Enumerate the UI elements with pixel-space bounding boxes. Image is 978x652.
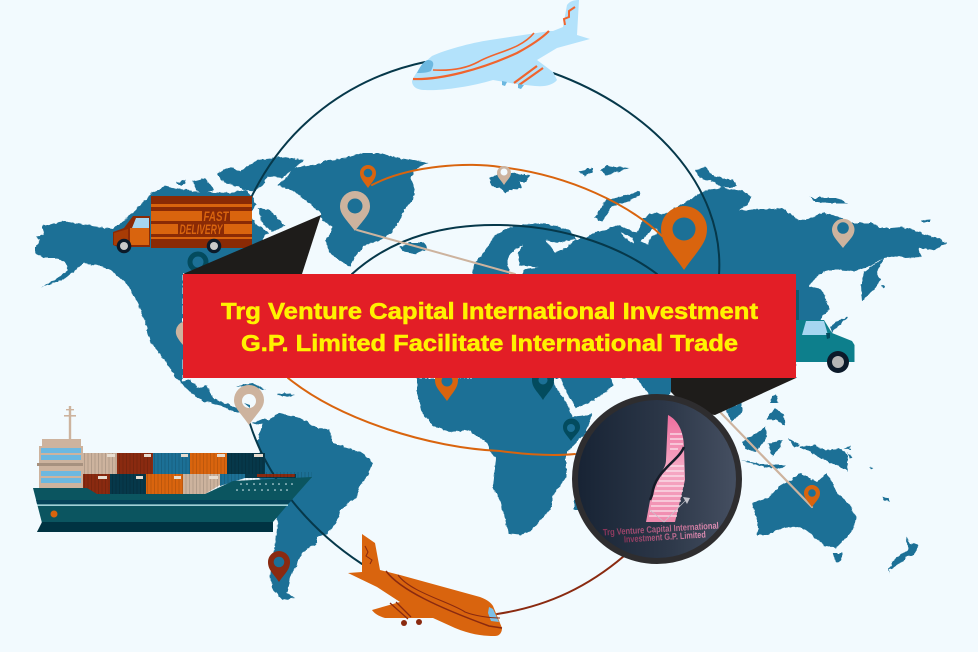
mast (64, 406, 76, 440)
Africa (417, 378, 592, 535)
Labrador (258, 208, 285, 232)
Australia (752, 473, 856, 548)
containers (83, 453, 312, 494)
callout pointer: upper (183, 215, 321, 274)
brown route (497, 556, 624, 614)
pin: Central America tan (234, 385, 264, 425)
route lines (250, 62, 812, 614)
Arabia (560, 378, 614, 408)
pin: USA tan (176, 322, 183, 345)
inland seas: Baltic, White Sea, Ob (507, 228, 658, 276)
Caribbean islands (236, 383, 295, 425)
banner title line 1: Trg Venture Capital International Investment (221, 298, 758, 324)
Alaska and Arctic islands (150, 157, 305, 199)
Southeast Asia (726, 395, 873, 471)
Iceland (400, 243, 427, 254)
Sakhalin, Kamchatka (861, 258, 884, 302)
outer circle route top left (250, 62, 425, 200)
pin: Siberia tan (832, 219, 854, 248)
Japan (830, 317, 848, 332)
company logo text: Investment G.P. Limited (624, 530, 706, 544)
pin: Svalbard tan (497, 166, 511, 185)
tower logo (646, 415, 690, 522)
pin: South America dark red (268, 551, 290, 582)
Madagascar (574, 497, 580, 510)
portholes (236, 483, 293, 491)
truck: teal (796, 290, 854, 373)
superstructure (37, 439, 84, 489)
company logo text: Trg Venture Capital International (603, 520, 719, 538)
tan route Australia (720, 412, 812, 507)
pin: West Africa orange (435, 376, 458, 401)
Eurasia (472, 188, 947, 378)
Greenland (277, 153, 428, 267)
callout pointer: lower (671, 378, 796, 415)
truck: fast delivery (113, 196, 252, 253)
Arctic archipelagos (489, 166, 930, 289)
tan route Greenland (357, 230, 515, 274)
orange bottom arc route (288, 378, 575, 455)
pin: Australia orange (804, 485, 820, 507)
truck: fast delivery: FAST (204, 208, 230, 224)
inner arc route (352, 225, 657, 274)
pin: Canada dark (190, 254, 206, 270)
airplane: blue top (412, 0, 590, 90)
pin: North East Africa dark (532, 376, 554, 400)
pin: Greenland tan (340, 191, 370, 231)
banner title line 2: G.P. Limited Facilitate International Trade (241, 330, 738, 356)
banner (183, 274, 796, 378)
pin: Greenland orange (360, 165, 376, 188)
pin: Russia large orange (661, 206, 707, 270)
hull (33, 477, 312, 532)
airplane: orange bottom (348, 534, 502, 636)
orange top arc route (372, 165, 662, 236)
Novaya Zemlya (594, 191, 640, 222)
Tasmania, New Zealand, islands (832, 496, 919, 574)
pin: East Africa dark (563, 418, 580, 441)
truck: fast delivery: DELIVERY (180, 221, 224, 237)
India (636, 378, 676, 395)
outer circle route bottom (250, 424, 362, 564)
outer circle route top right (553, 73, 719, 275)
South America (257, 413, 373, 600)
world map (35, 153, 947, 600)
North America (35, 189, 300, 412)
cargo ship (33, 406, 312, 532)
company logo text (603, 520, 719, 544)
company badge (575, 397, 739, 561)
